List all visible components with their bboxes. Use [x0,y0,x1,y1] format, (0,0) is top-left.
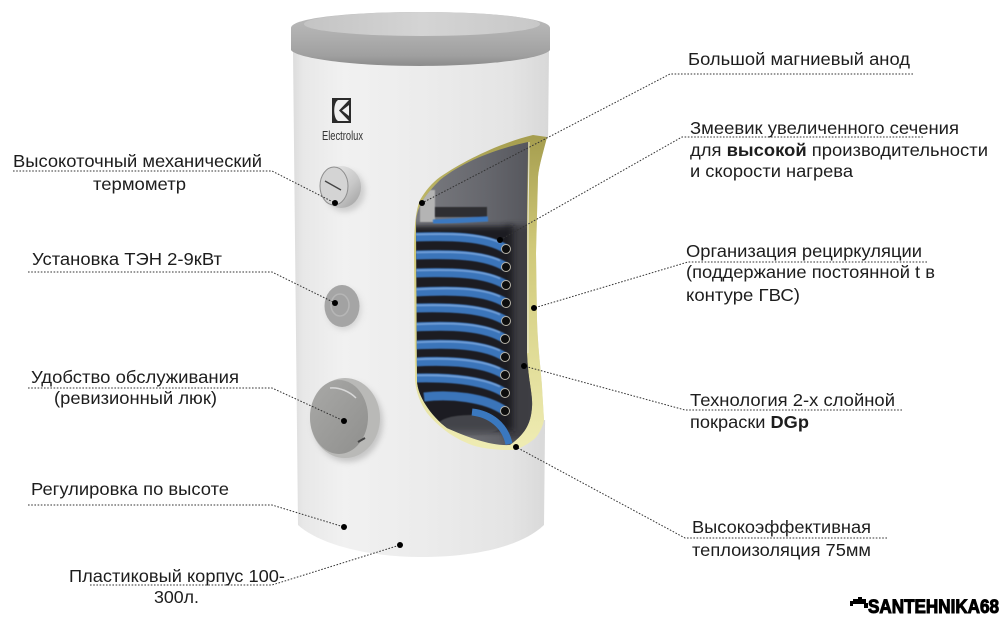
leader: magnesium anode [419,74,913,206]
leader: coil [497,137,923,243]
anode rod [420,190,435,222]
label: recirculation [686,241,935,305]
label: coating: покраски DGp [690,412,809,432]
cutaway section [405,135,547,450]
label: height adjustment: Регулировка по высоте [31,479,229,499]
label: coating: Технология 2-х слойной [690,390,895,410]
leader: plastic casing [90,542,403,585]
label: coil [690,118,988,181]
cavity [416,142,532,445]
label: insulation: Высокоэффективная [692,517,871,537]
leader: insulation [513,444,887,538]
label: plastic casing [69,566,285,607]
label: hatch: (ревизионный люк) [54,388,217,408]
label: thermometer [13,151,262,194]
heating element port [324,285,362,330]
leader: thermometer [13,171,338,206]
label: plastic casing: 300л. [154,587,199,607]
label: recirculation: (поддержание постоянной t в [686,262,935,282]
label: coil: для высокой производительности [690,140,988,160]
label: coating [690,390,895,432]
leader: heating element [28,272,338,306]
insulation layer [414,135,547,450]
label: thermometer: термометр [93,174,186,194]
Electrolux logo [322,98,363,143]
label: insulation [692,517,871,560]
lid [291,12,550,66]
coil turns [414,234,506,411]
leader: height adjustment [28,505,347,530]
label: coil: и скорости нагрева [690,161,853,181]
label: hatch: Удобство обслуживания [31,367,239,387]
icon: faucet [850,597,868,608]
leader: coating [521,363,902,410]
label: hatch [31,367,239,408]
label: thermometer: Высокоточный механический [13,151,262,171]
label: magnesium anode: Большой магниевый анод [688,49,910,69]
tank body [293,50,549,557]
service hatch [310,378,383,462]
label: recirculation: контуре ГВС) [686,285,800,305]
label: coil: Змеевик увеличенного сечения [690,118,959,138]
label: recirculation: Организация рециркуляции [686,241,922,261]
leader: recirculation [531,262,927,311]
Electrolux logo: Electrolux [322,128,363,143]
upper tube [433,207,488,222]
label: heating element: Установка ТЭН 2-9кВт [32,249,222,269]
leader: hatch [28,388,347,424]
water heater tank [291,12,556,557]
thermometer [320,166,365,212]
label: plastic casing: Пластиковый корпус 100- [69,566,285,586]
coil tube ends [500,244,510,416]
label: insulation: теплоизоляция 75мм [692,540,871,560]
background visible beyond the cut side [536,137,556,420]
